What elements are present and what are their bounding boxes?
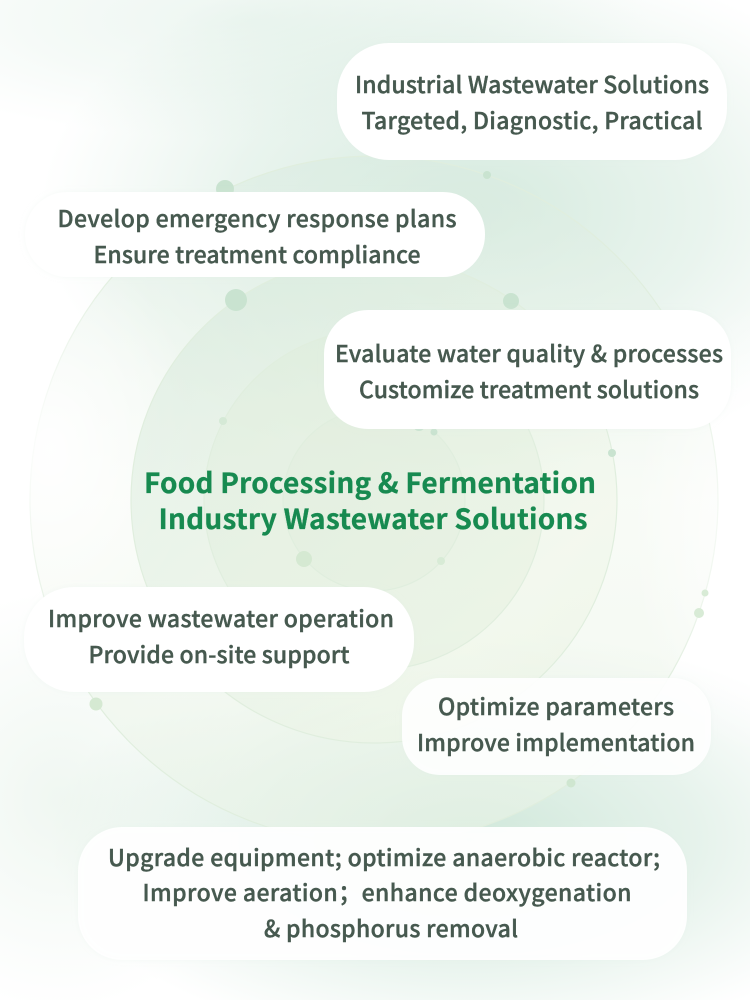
panel: optimize parameters: Optimize parameters xyxy=(438,688,674,722)
title: Food Processing & Fermentation xyxy=(144,462,596,502)
panel: evaluate water quality xyxy=(324,310,731,429)
panel: upgrade equipment xyxy=(78,827,687,960)
panel: upgrade equipment: Improve aeration；enhance deoxygenation xyxy=(142,874,632,908)
panel: optimize parameters: Improve implementation xyxy=(417,724,695,758)
panel: emergency response: Develop emergency response plans xyxy=(58,200,456,234)
panel: industrial wastewater solutions: Targeted, Diagnostic, Practical xyxy=(362,102,703,136)
panel: improve wastewater operation xyxy=(24,587,414,692)
panel: industrial wastewater solutions: Industrial Wastewater Solutions xyxy=(355,66,709,100)
title: Industry Wastewater Solutions xyxy=(158,498,588,538)
title xyxy=(144,462,596,538)
ring nodes xyxy=(90,171,708,788)
panel: improve wastewater operation: Provide on-site support xyxy=(88,636,350,670)
panel: industrial wastewater solutions xyxy=(337,43,727,160)
panel: upgrade equipment: & phosphorus removal xyxy=(264,910,518,944)
panel: evaluate water quality: Customize treatment solutions xyxy=(359,371,699,405)
panel: emergency response: Ensure treatment compliance xyxy=(94,236,420,270)
panel: optimize parameters xyxy=(402,678,711,775)
panel: upgrade equipment: Upgrade equipment; optimize anaerobic reactor; xyxy=(108,839,660,873)
panel: emergency response xyxy=(25,192,485,277)
concentric rings xyxy=(131,257,617,743)
panel: improve wastewater operation: Improve wastewater operation xyxy=(48,600,394,634)
panel: evaluate water quality: Evaluate water quality & processes xyxy=(335,335,723,369)
